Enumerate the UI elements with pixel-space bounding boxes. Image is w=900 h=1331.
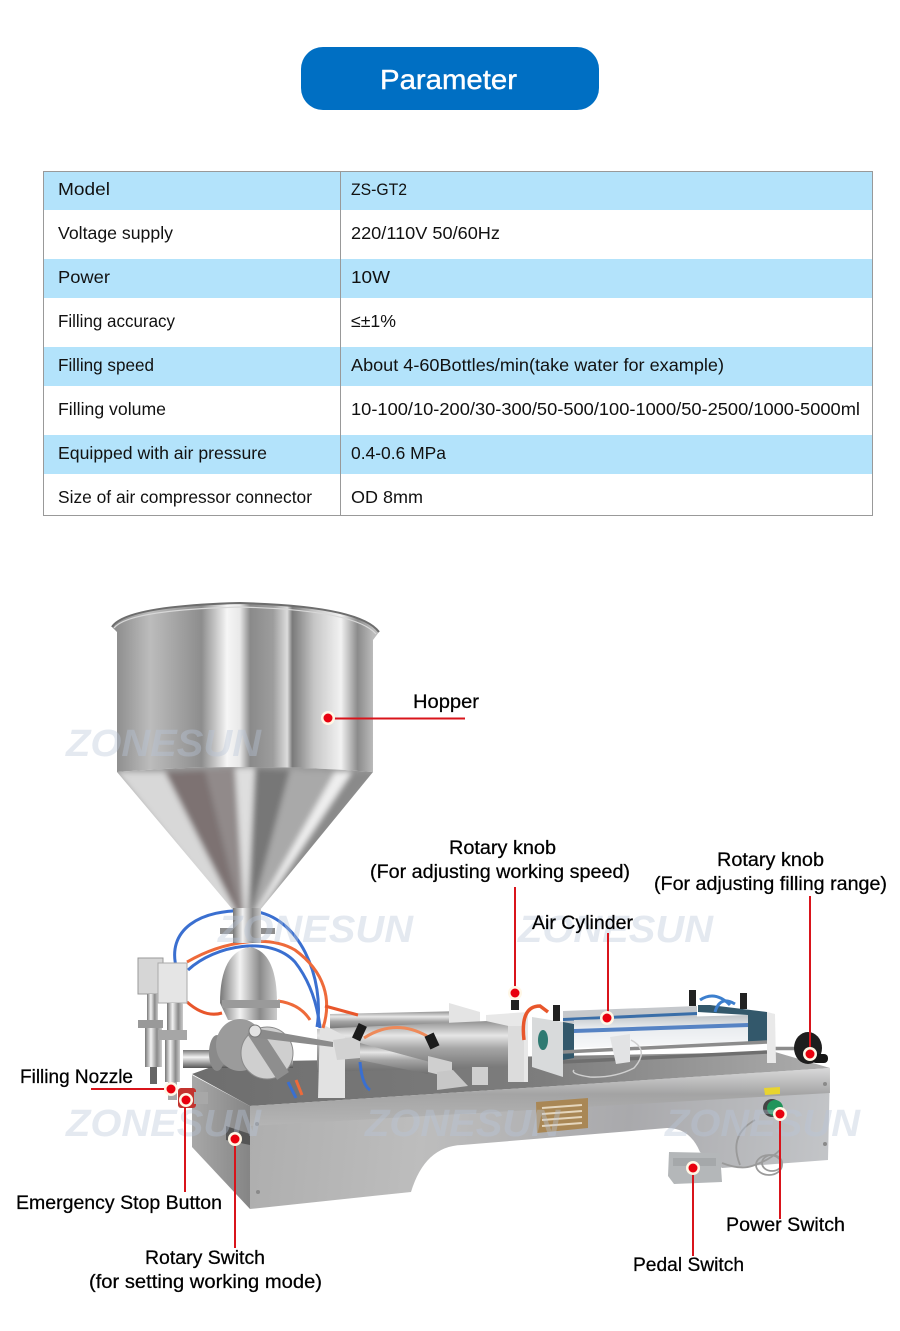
hopper outlet clamp bbox=[220, 908, 275, 943]
actuator head block bbox=[333, 1036, 360, 1060]
row: voltage supply: 220/110V 50/60Hz bbox=[351, 223, 500, 243]
title button: Parameter bbox=[301, 47, 599, 110]
mounting leg bbox=[472, 1067, 488, 1085]
watermarks: ZONESUN bbox=[65, 1103, 263, 1145]
valve collar bbox=[222, 1000, 280, 1008]
cable coil bbox=[722, 1120, 782, 1175]
callout: power switch: Power Switch bbox=[726, 1215, 845, 1236]
actuator arm bbox=[250, 1028, 333, 1047]
watermarks: ZONESUN bbox=[664, 1103, 862, 1145]
actuator rear block bbox=[428, 1056, 452, 1075]
plate leg bbox=[508, 1026, 524, 1082]
screws bbox=[255, 1082, 827, 1194]
callout: pedal switch: Pedal Switch bbox=[633, 1255, 744, 1276]
row: air pressure bbox=[58, 443, 446, 463]
teal flange bbox=[538, 1030, 548, 1050]
filling nozzle right bbox=[158, 963, 187, 1100]
blue and orange air tubes bbox=[175, 911, 427, 1098]
callout: air cylinder bbox=[532, 913, 634, 1025]
row: filling accuracy bbox=[58, 311, 396, 331]
air cylinder front tube bbox=[574, 1015, 748, 1048]
pedal bbox=[668, 1152, 722, 1184]
top fittings and blue tube bbox=[511, 990, 747, 1040]
back plate bbox=[449, 1003, 480, 1030]
rotary switch bbox=[226, 1126, 250, 1145]
row: filling volume bbox=[58, 399, 860, 419]
row: filling volume: 10-100/10-200/30-300/50-500/100-1000/50-2500/1000-5000ml bbox=[351, 399, 860, 419]
callout: rotary knob filling range: Rotary knob bbox=[717, 850, 824, 871]
pivot bbox=[249, 1025, 261, 1037]
row: power bbox=[58, 267, 391, 287]
callout: power switch bbox=[726, 1107, 845, 1236]
slider block bbox=[610, 1034, 630, 1064]
guide rods bbox=[563, 1042, 798, 1062]
callout: rotary switch bbox=[89, 1132, 322, 1293]
plate between cylinders bbox=[486, 1012, 528, 1082]
callout: filling nozzle: Filling Nozzle bbox=[20, 1067, 133, 1088]
watermarks: ZONESUN bbox=[364, 1103, 562, 1145]
plate left of main cylinder bbox=[318, 1023, 345, 1098]
row: filling accuracy: Filling accuracy bbox=[58, 311, 175, 331]
callout: pedal switch bbox=[633, 1161, 744, 1276]
filling nozzle left bbox=[138, 958, 163, 1084]
horizontal feed pipe bbox=[183, 1050, 293, 1068]
row: filling speed: Filling speed bbox=[58, 355, 154, 375]
rear valve disc bbox=[209, 1035, 225, 1071]
teal end right bbox=[698, 1005, 767, 1042]
back cylinder bbox=[330, 1011, 465, 1030]
sensor cable bbox=[573, 1040, 641, 1077]
base bright band bbox=[250, 1068, 830, 1126]
callout: rotary knob filling range: (For adjusting filling range) bbox=[654, 874, 887, 895]
row: air compressor connector: Size of air compressor connector bbox=[58, 487, 312, 507]
callout: hopper bbox=[321, 692, 480, 725]
row: model: Model bbox=[58, 179, 110, 199]
row: model: ZS-GT2 bbox=[351, 181, 407, 199]
base front panel bbox=[250, 1068, 830, 1209]
power button bbox=[763, 1099, 783, 1117]
left mounting plate bbox=[532, 1017, 563, 1077]
row: power: 10W bbox=[351, 267, 391, 287]
valve elbow pipe bbox=[220, 947, 277, 1020]
row: air pressure: Equipped with air pressure bbox=[58, 443, 267, 463]
watermarks: ZONESUN bbox=[217, 909, 415, 951]
callout: emergency stop button bbox=[16, 1093, 222, 1214]
callout: rotary knob working speed: (For adjusting working speed) bbox=[370, 862, 630, 883]
watermarks: ZONESUN bbox=[517, 909, 715, 951]
actuator body bbox=[360, 1043, 430, 1074]
callout: filling nozzle bbox=[20, 1067, 178, 1096]
power label bbox=[764, 1087, 780, 1095]
callout: hopper: Hopper bbox=[413, 692, 480, 713]
rear blue stripe bbox=[563, 1012, 697, 1021]
row: filling volume: Filling volume bbox=[58, 399, 166, 419]
name plate bbox=[536, 1098, 588, 1133]
rotary valve bbox=[216, 1019, 293, 1079]
parameter table bbox=[44, 171, 872, 516]
watermarks: ZONESUN bbox=[65, 723, 263, 765]
title button: Parameter: Parameter bbox=[380, 64, 517, 95]
air cylinder rear tube bbox=[563, 1006, 697, 1024]
row: air pressure: 0.4-0.6 MPa bbox=[351, 443, 446, 463]
hopper bbox=[110, 603, 380, 915]
watermarks bbox=[65, 723, 862, 1145]
main cylinder bbox=[317, 1020, 508, 1072]
row: filling speed: About 4-60Bottles/min(take water for example) bbox=[351, 355, 724, 375]
callout: rotary knob working speed: Rotary knob bbox=[449, 838, 556, 859]
row: power: Power bbox=[58, 267, 110, 287]
actuator fittings bbox=[172, 963, 439, 1049]
row: filling speed bbox=[58, 355, 724, 375]
callout: air cylinder: Air Cylinder bbox=[532, 913, 634, 934]
front blue stripe bbox=[574, 1023, 748, 1033]
right mounting plate bbox=[767, 1012, 776, 1063]
row: filling accuracy: ≤±1% bbox=[351, 311, 396, 331]
callout: rotary switch: Rotary Switch bbox=[145, 1248, 265, 1269]
row: air compressor connector: OD 8mm bbox=[351, 487, 423, 507]
teal end left bbox=[563, 1022, 574, 1060]
emergency stop button bbox=[178, 1088, 208, 1108]
machine illustration bbox=[110, 603, 830, 1209]
callout: emergency stop button: Emergency Stop Button bbox=[16, 1193, 222, 1214]
row: voltage supply bbox=[58, 223, 500, 243]
base left side panel bbox=[192, 1075, 250, 1209]
actuator bracket bbox=[437, 1070, 468, 1090]
row: model bbox=[58, 179, 407, 199]
handwheel bbox=[794, 1032, 828, 1064]
base top plate bbox=[192, 1052, 830, 1106]
callout: rotary knob filling range bbox=[654, 850, 887, 1061]
callout: rotary switch: (for setting working mode) bbox=[89, 1272, 322, 1293]
row: voltage supply: Voltage supply bbox=[58, 223, 173, 243]
callout: rotary knob working speed bbox=[370, 838, 630, 1000]
